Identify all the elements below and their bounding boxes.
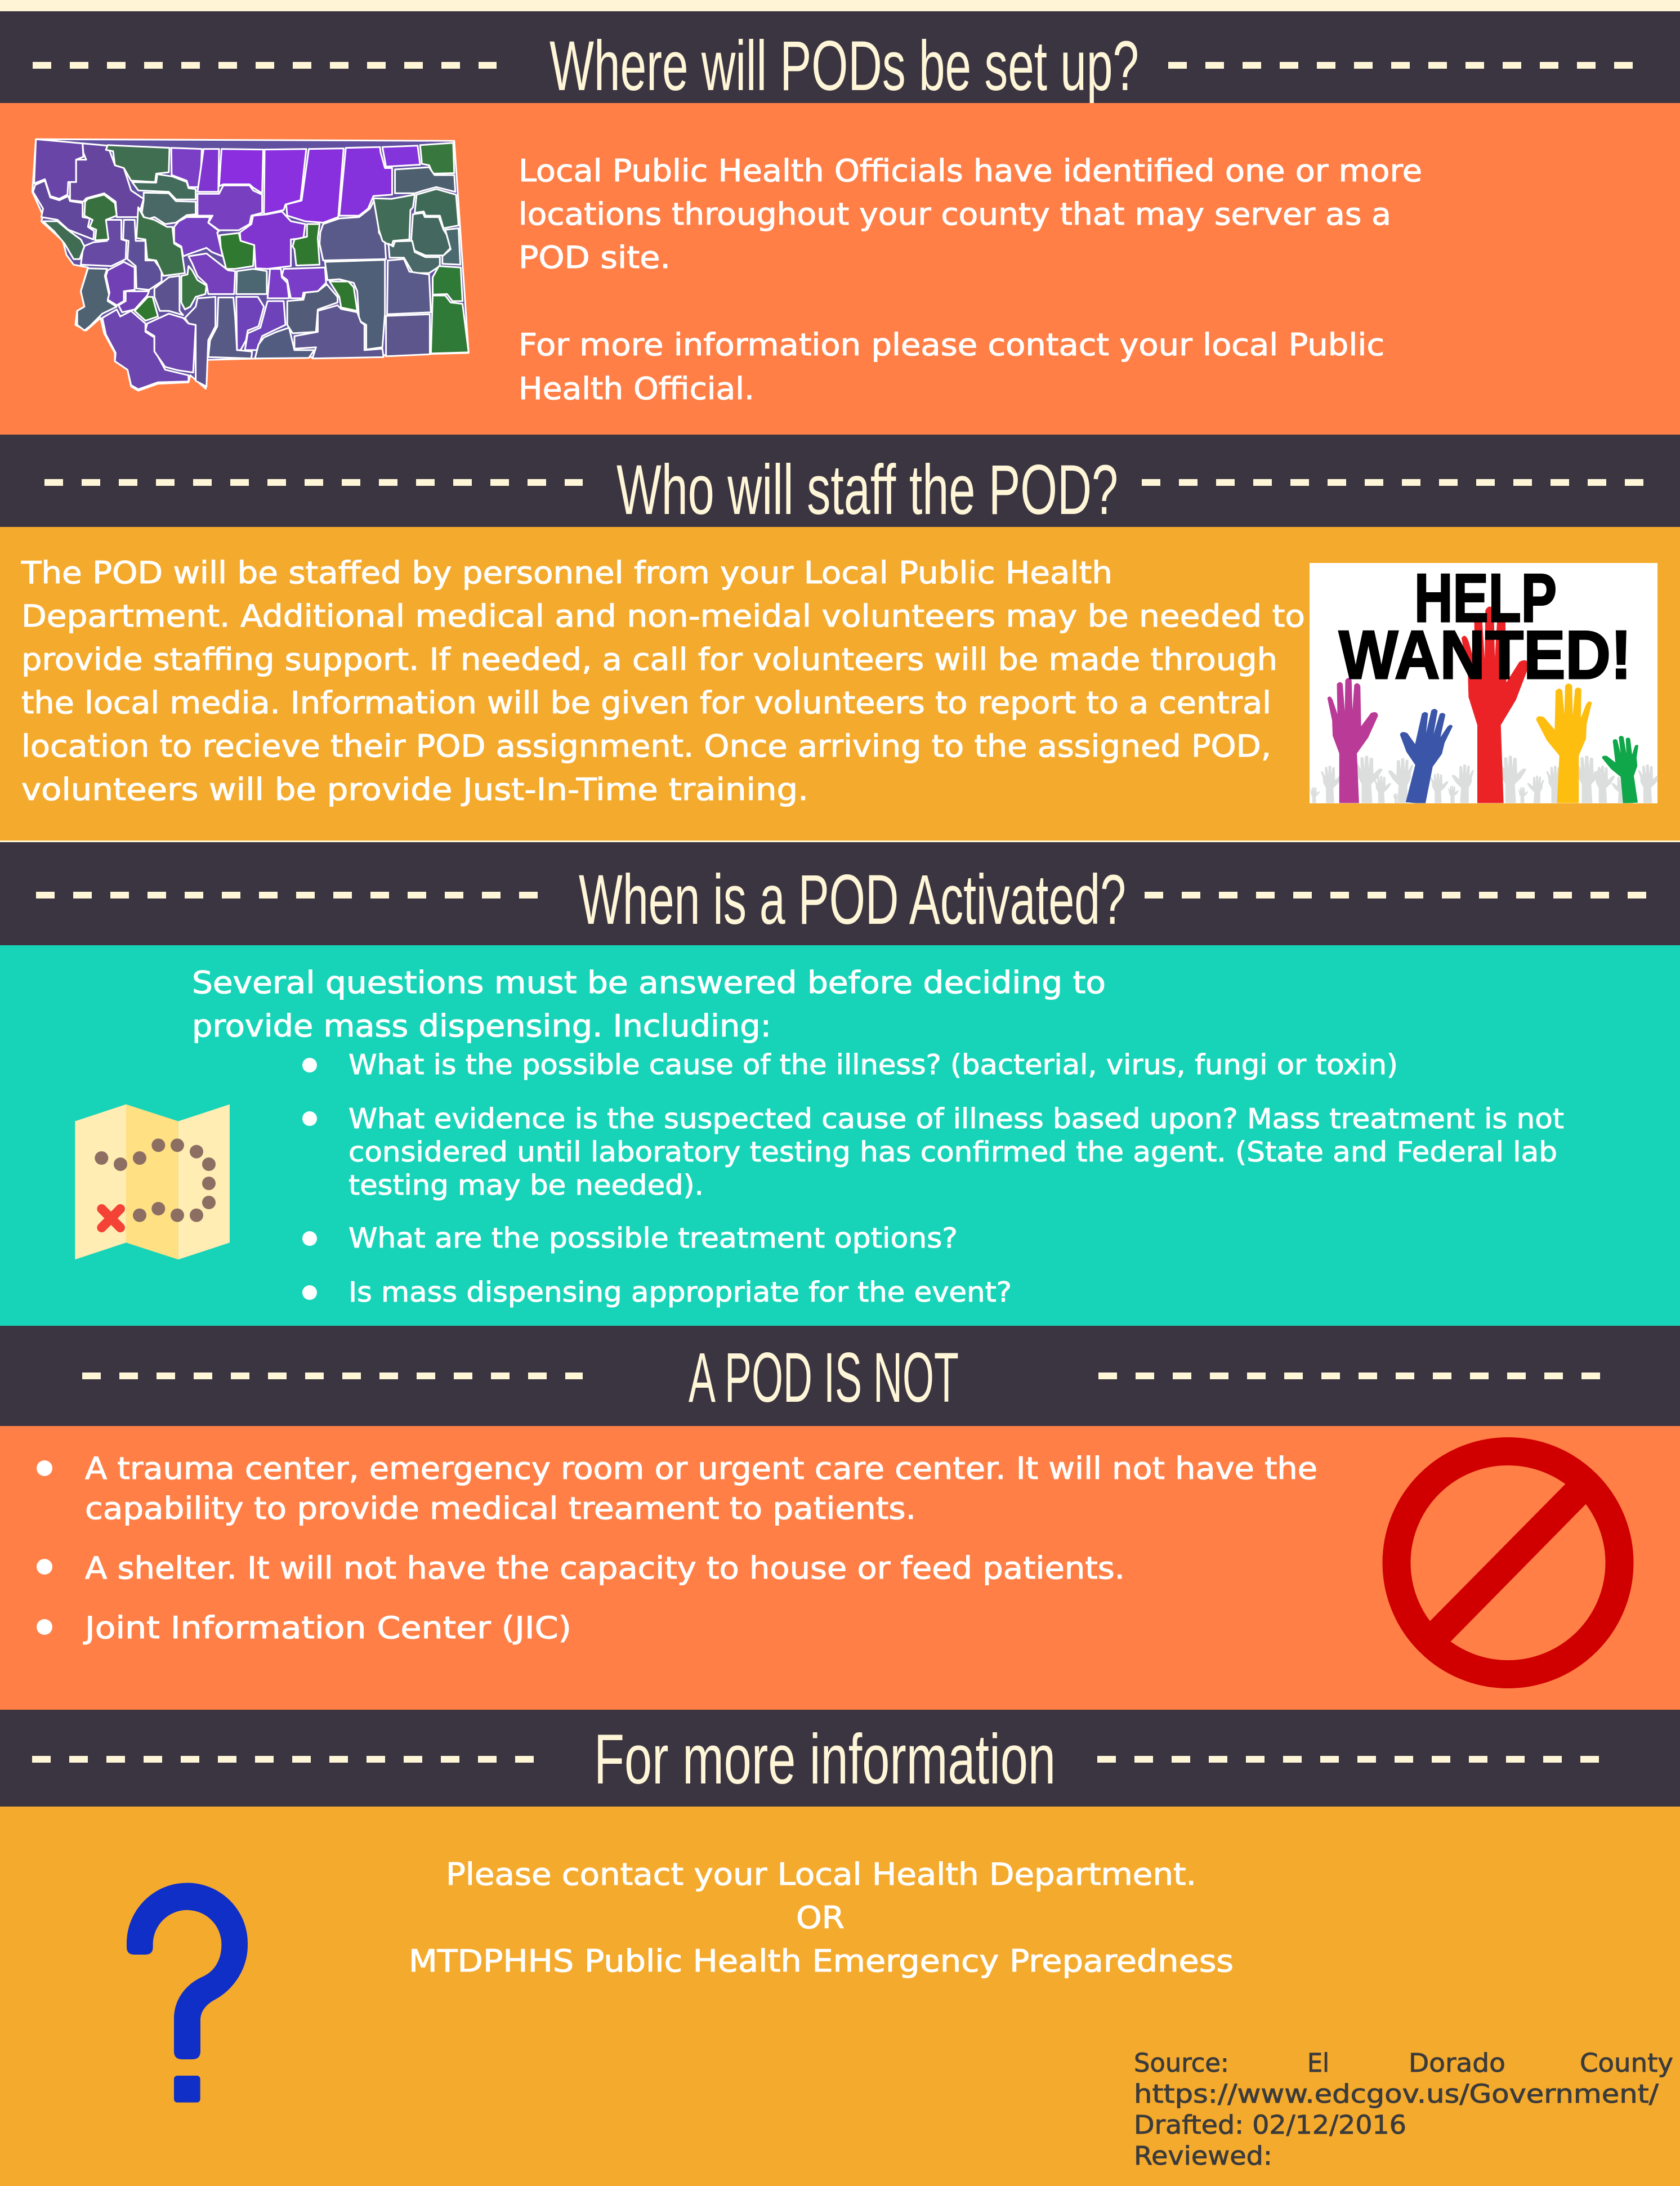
text: POD locations: For more information please contact your local Public — [519, 327, 1384, 363]
list: activation questions: considered until laboratory testing has confirmed the agent. (State and Federal lab — [348, 1136, 1557, 1168]
list: what a POD is not: A shelter. It will not have the capacity to house or feed patients. — [85, 1550, 1125, 1586]
text: source and dates: Dorado — [1409, 2048, 1505, 2078]
icon: help wanted raised hands: HELP — [1414, 560, 1557, 636]
text: staffing: provide staffing support. If needed, a call for volunteers will be made through — [21, 642, 1277, 677]
list: activation questions: testing may be needed). — [348, 1169, 704, 1201]
text: source and dates: Source: — [1134, 2048, 1229, 2078]
text: POD locations — [519, 153, 1422, 406]
list: what a POD is not — [37, 1451, 1317, 1646]
icon: treasure map — [75, 1105, 230, 1259]
text: source and dates: Reviewed: — [1134, 2141, 1272, 2171]
text: staffing: The POD will be staffed by personnel from your Local Public Health — [21, 555, 1112, 591]
icon: prohibited sign — [1396, 1451, 1619, 1674]
text: POD locations: POD site. — [519, 240, 671, 275]
list: activation questions: What are the possible treatment options? — [348, 1222, 958, 1254]
map of Montana counties — [32, 139, 468, 391]
list: what a POD is not: capability to provide medical treament to patients. — [85, 1491, 916, 1526]
text: staffing: the local media. Information will be given for volunteers to report to a central — [21, 685, 1271, 721]
list: what a POD is not: A trauma center, emergency room or urgent care center. It will not have the — [85, 1451, 1317, 1486]
text: source and dates: County — [1580, 2048, 1673, 2078]
list: activation questions: Is mass dispensing appropriate for the event? — [348, 1276, 1012, 1308]
text: source and dates — [1134, 2048, 1673, 2171]
top cream strip — [0, 0, 1680, 11]
section header: Where will PODs be set up? — [0, 11, 1680, 105]
heading: Where will PODs be set up? — [549, 27, 1139, 105]
text: POD locations: locations throughout your county that may server as a — [519, 196, 1391, 232]
list: activation questions: What is the possible cause of the illness? (bacterial, virus, fungi or toxin) — [348, 1049, 1398, 1081]
text: intro questions: provide mass dispensing. Including: — [192, 1008, 771, 1044]
text: intro questions — [192, 965, 1106, 1044]
list: activation questions: What evidence is the suspected cause of illness based upon? Mass treatment is not — [348, 1103, 1564, 1135]
section header: When is a POD Activated? — [0, 841, 1680, 945]
text: source and dates: Drafted: 02/12/2016 — [1134, 2110, 1406, 2140]
panel: who will staff the POD — [0, 527, 1680, 841]
list: what a POD is not: Joint Information Center (JIC) — [83, 1610, 571, 1646]
list: activation questions — [302, 1049, 1564, 1308]
panel: for more information — [0, 1807, 1680, 2186]
heading: For more information — [594, 1720, 1056, 1799]
text: staffing — [21, 555, 1305, 807]
panel: where PODs are set up — [0, 103, 1680, 435]
icon: question mark — [127, 1883, 248, 2103]
text: POD locations: Health Official. — [519, 371, 754, 406]
text: source and dates: El — [1307, 2048, 1329, 2078]
text: staffing: Department. Additional medical and non-meidal volunteers may be needed to — [21, 598, 1305, 634]
icon: help wanted raised hands — [1310, 560, 1660, 805]
text: POD locations: Local Public Health Officials have identified one or more — [519, 153, 1422, 189]
text: staffing: volunteers will be provide Just-In-Time training. — [21, 772, 808, 807]
text: contact details — [409, 1857, 1234, 1979]
section header: For more information — [0, 1710, 1680, 1807]
icon: help wanted raised hands: WANTED! — [1339, 616, 1632, 693]
heading: A POD IS NOT — [689, 1339, 959, 1417]
panel: when is a POD activated — [0, 945, 1680, 1326]
text: contact details: OR — [796, 1900, 845, 1935]
text: contact details: MTDPHHS Public Health Emergency Preparedness — [409, 1943, 1234, 1979]
text: intro questions: Several questions must be answered before deciding to — [192, 965, 1106, 1000]
heading: Who will staff the POD? — [616, 451, 1118, 529]
panel: a POD is not — [0, 1426, 1680, 1710]
section header: A POD IS NOT — [0, 1326, 1680, 1426]
text: source and dates: https://www.edcgov.us/Government/ — [1134, 2079, 1659, 2109]
text: staffing: location to recieve their POD assignment. Once arriving to the assigned POD, — [21, 728, 1271, 764]
heading: When is a POD Activated? — [579, 861, 1126, 939]
section header: Who will staff the POD? — [0, 435, 1680, 529]
text: contact details: Please contact your Local Health Department. — [446, 1857, 1196, 1892]
